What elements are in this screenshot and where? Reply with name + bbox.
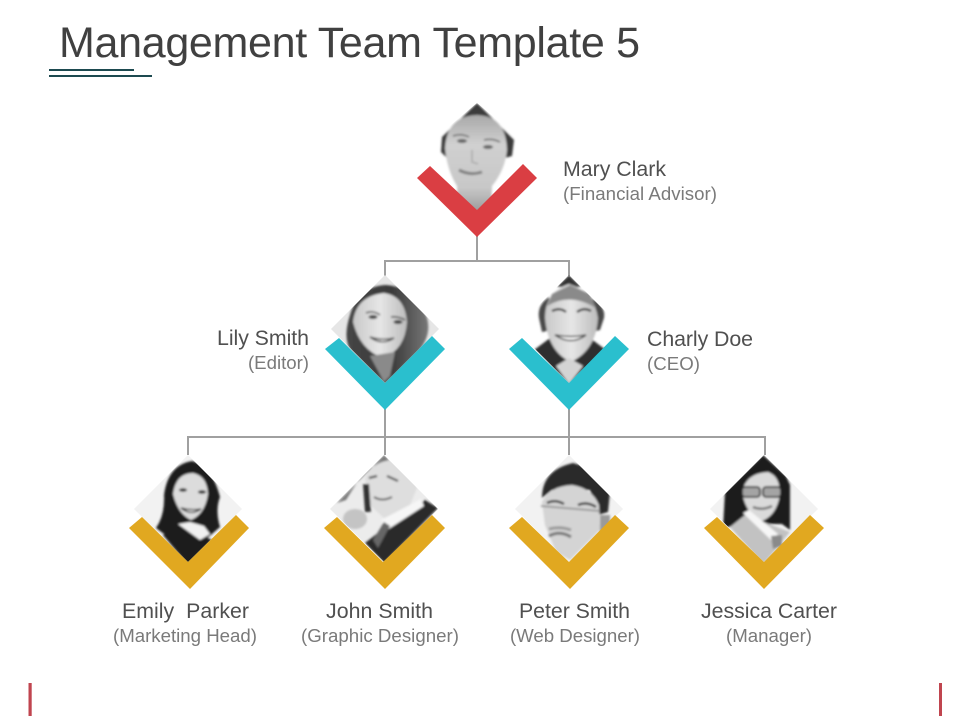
member: John Smith [324,455,445,589]
member: Peter Smith [509,455,629,589]
portrait: Emily Parker [134,455,242,565]
right corner mark [939,683,942,716]
chevron: gold [509,515,629,589]
portrait: Peter Smith [515,455,623,563]
left corner mark [28,683,32,716]
portrait: Mary Clark [441,103,514,212]
connector lines [188,236,765,455]
chevron: teal [509,336,629,410]
name: Lily Smith [217,326,309,373]
name: Jessica Carter [701,599,837,646]
name: Peter Smith [510,599,640,646]
name: Peter Smith: (Web Designer) [510,625,640,646]
name: Charly Doe [647,327,753,374]
member: Jessica Carter [704,455,824,589]
portrait: Charly Doe [534,275,606,385]
name: John Smith [301,599,459,646]
chevron: teal [325,336,445,410]
chevron: gold [129,515,249,589]
name: Jessica Carter: Jessica Carter [701,599,837,623]
name: Charly Doe: Charly Doe [647,327,753,351]
title underline [49,69,152,77]
name: Charly Doe: (CEO) [647,353,700,374]
name: John Smith: John Smith [326,599,433,623]
chevron: gold [704,515,824,589]
name: Mary Clark: (Financial Advisor) [563,183,717,204]
name: Jessica Carter: (Manager) [726,625,812,646]
member: Lily Smith [325,275,445,410]
name: Emily Parker: Emily Parker [122,599,249,623]
name: Lily Smith: Lily Smith [217,326,309,350]
name: Lily Smith: (Editor) [248,352,309,373]
name: Mary Clark [563,157,717,204]
title: Management Team Template 5 [59,19,640,67]
name: Emily Parker [113,599,257,646]
portrait: Jessica Carter [710,455,818,565]
portrait: Lily Smith [331,275,439,384]
chevron: gold [324,515,445,589]
member: Charly Doe [509,275,629,410]
member: Mary Clark [417,103,537,237]
name: John Smith: (Graphic Designer) [301,625,459,646]
name: Peter Smith: Peter Smith [519,599,630,623]
name: Mary Clark: Mary Clark [563,157,666,181]
portrait: John Smith [330,455,438,563]
chevron: red [417,164,537,237]
name: Emily Parker: (Marketing Head) [113,625,257,646]
member: Emily Parker [129,455,249,589]
